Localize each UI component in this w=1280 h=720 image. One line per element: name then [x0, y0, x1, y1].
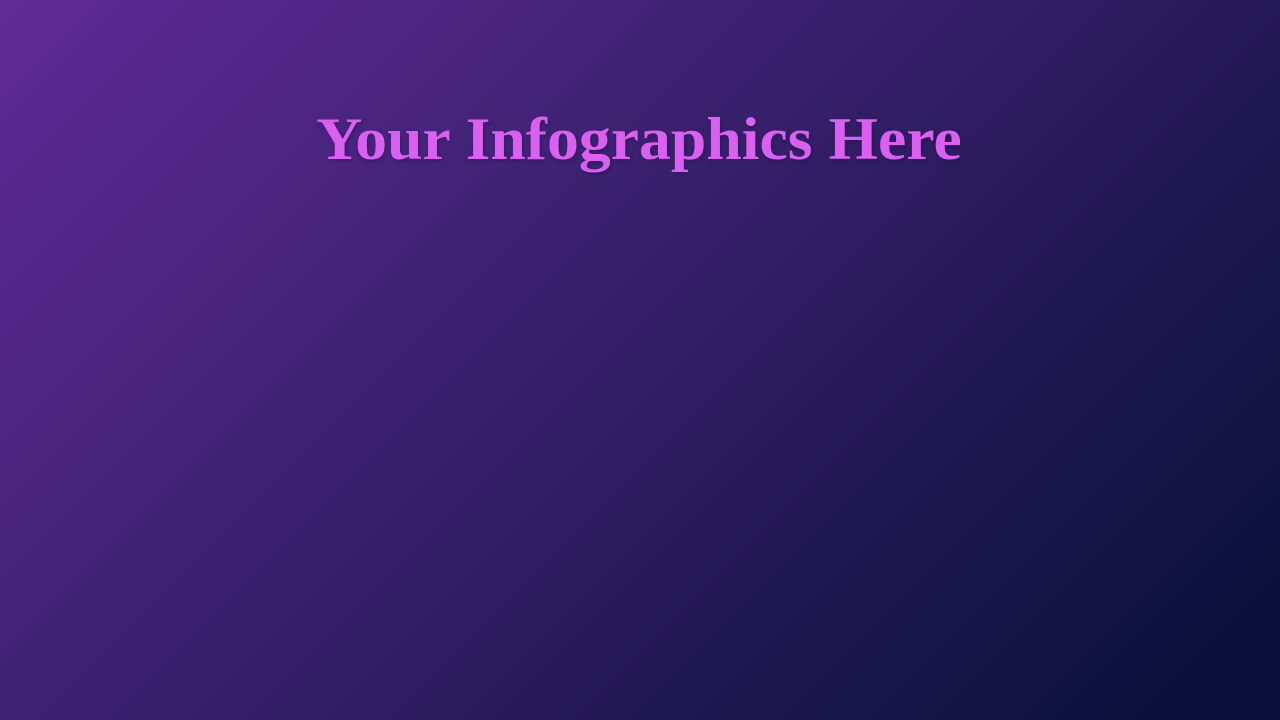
title: Your Infographics Here: [316, 106, 962, 172]
